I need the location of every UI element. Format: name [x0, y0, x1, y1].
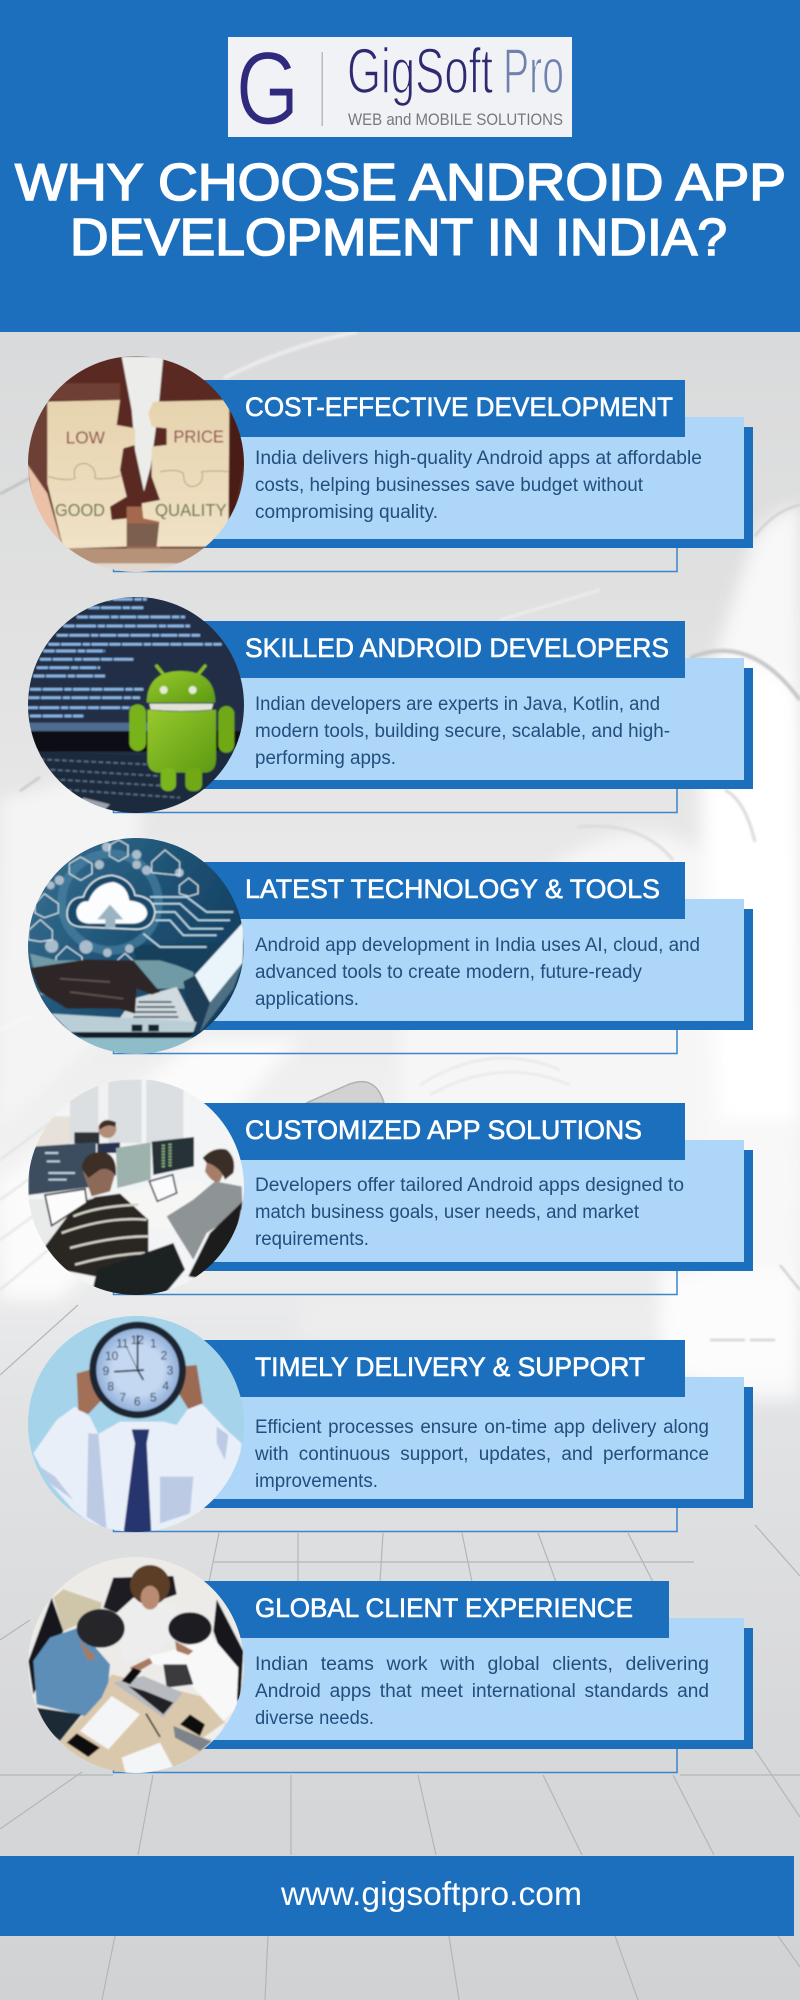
title: DEVELOPMENT IN INDIA? — [70, 209, 727, 267]
heading bar — [150, 862, 685, 919]
heading: SKILLED ANDROID DEVELOPERS — [245, 633, 669, 663]
body text — [255, 935, 700, 1010]
logo mark: G: G — [236, 31, 299, 147]
body text — [255, 1654, 709, 1729]
photo: man holding clock: 10 — [105, 1349, 119, 1363]
footer band — [0, 1856, 794, 1936]
photo: man holding clock: 1 — [150, 1336, 157, 1350]
body text: advanced tools to create modern, future-ready — [255, 962, 642, 983]
logo wordmark: GigSoft — [347, 35, 493, 107]
photo: developers team at monitors — [28, 1080, 244, 1295]
body text: costs, helping businesses save budget without — [255, 475, 644, 496]
photo: man holding clock: 4 — [162, 1379, 169, 1393]
body text: performing apps. — [255, 748, 396, 769]
photo: man holding clock: 6 — [134, 1395, 141, 1409]
body text: requirements. — [255, 1229, 369, 1250]
body text: Android app development in India uses AI, cloud, and — [255, 935, 700, 956]
photo: man holding clock: 9 — [103, 1364, 110, 1378]
website url: www.gigsoftpro.com — [280, 1875, 582, 1912]
heading bar — [150, 380, 685, 437]
heading bar — [150, 1340, 685, 1397]
photo: puzzle low price good quality: LOW — [66, 427, 106, 447]
title: WHY CHOOSE ANDROID APP — [15, 154, 786, 212]
photo: man holding clock — [28, 1316, 244, 1532]
heading: LATEST TECHNOLOGY & TOOLS — [245, 874, 660, 904]
body text — [254, 1417, 709, 1492]
photo: team meeting from above — [28, 1557, 244, 1773]
heading: COST-EFFECTIVE DEVELOPMENT — [245, 392, 673, 422]
photo: man holding clock: 11 — [116, 1336, 129, 1350]
heading: GLOBAL CLIENT EXPERIENCE — [255, 1593, 633, 1623]
photo: puzzle low price good quality: PRICE — [173, 427, 224, 447]
photo: man holding clock: 5 — [150, 1390, 157, 1404]
body text: India delivers high-quality Android apps at affordable — [255, 448, 702, 469]
heading: CUSTOMIZED APP SOLUTIONS — [245, 1115, 642, 1145]
body text: modern tools, building secure, scalable, and high- — [255, 721, 670, 742]
card 5: timely delivery and support — [20, 1310, 753, 1543]
photo: man holding clock: 2 — [161, 1349, 168, 1363]
photo: man holding clock: 12 — [131, 1333, 144, 1347]
heading bar — [150, 621, 685, 678]
body text: Indian teams work with global clients, delivering — [255, 1654, 709, 1675]
photo: android robot on laptop with code — [28, 597, 244, 813]
title — [15, 154, 786, 267]
photo: puzzle low price good quality: QUALITY — [155, 500, 227, 520]
body text: diverse needs. — [255, 1708, 374, 1729]
body text: Android apps that meet international standards and — [255, 1681, 709, 1702]
heading bar — [150, 1103, 685, 1160]
logo — [228, 31, 572, 147]
logo tagline: WEB and MOBILE SOLUTIONS — [348, 110, 563, 129]
photo: man holding clock: 3 — [167, 1363, 174, 1377]
photo: puzzle low price good quality: GOOD — [55, 500, 105, 520]
card 3: latest technology and tools — [20, 832, 753, 1068]
body text: with continuous support, updates, and performance — [254, 1444, 709, 1465]
logo: Pro — [503, 35, 564, 107]
card 1: cost-effective development — [20, 350, 753, 585]
heading: TIMELY DELIVERY & SUPPORT — [255, 1352, 645, 1382]
photo: man holding clock: 7 — [119, 1390, 126, 1404]
photo: man holding clock: 8 — [107, 1380, 114, 1394]
card 2: skilled android developers — [20, 591, 753, 824]
card 6: global client experience — [20, 1551, 753, 1784]
body text: Indian developers are experts in Java, Kotlin, and — [255, 694, 660, 715]
body text: match business goals, user needs, and market — [255, 1202, 640, 1223]
header band — [0, 0, 800, 332]
body text: Developers offer tailored Android apps designed to — [255, 1175, 684, 1196]
photo: cloud technology and laptop — [28, 838, 244, 1054]
body text — [255, 448, 702, 523]
body text: improvements. — [255, 1471, 378, 1492]
heading bar — [150, 1581, 669, 1638]
body text: compromising quality. — [255, 502, 438, 523]
card 4: customized app solutions — [20, 1073, 753, 1306]
body text — [255, 694, 670, 769]
body text: Efficient processes ensure on-time app delivery along — [255, 1417, 709, 1438]
photo: puzzle low price good quality — [28, 356, 244, 572]
body text — [255, 1175, 684, 1250]
body text: applications. — [255, 989, 359, 1010]
